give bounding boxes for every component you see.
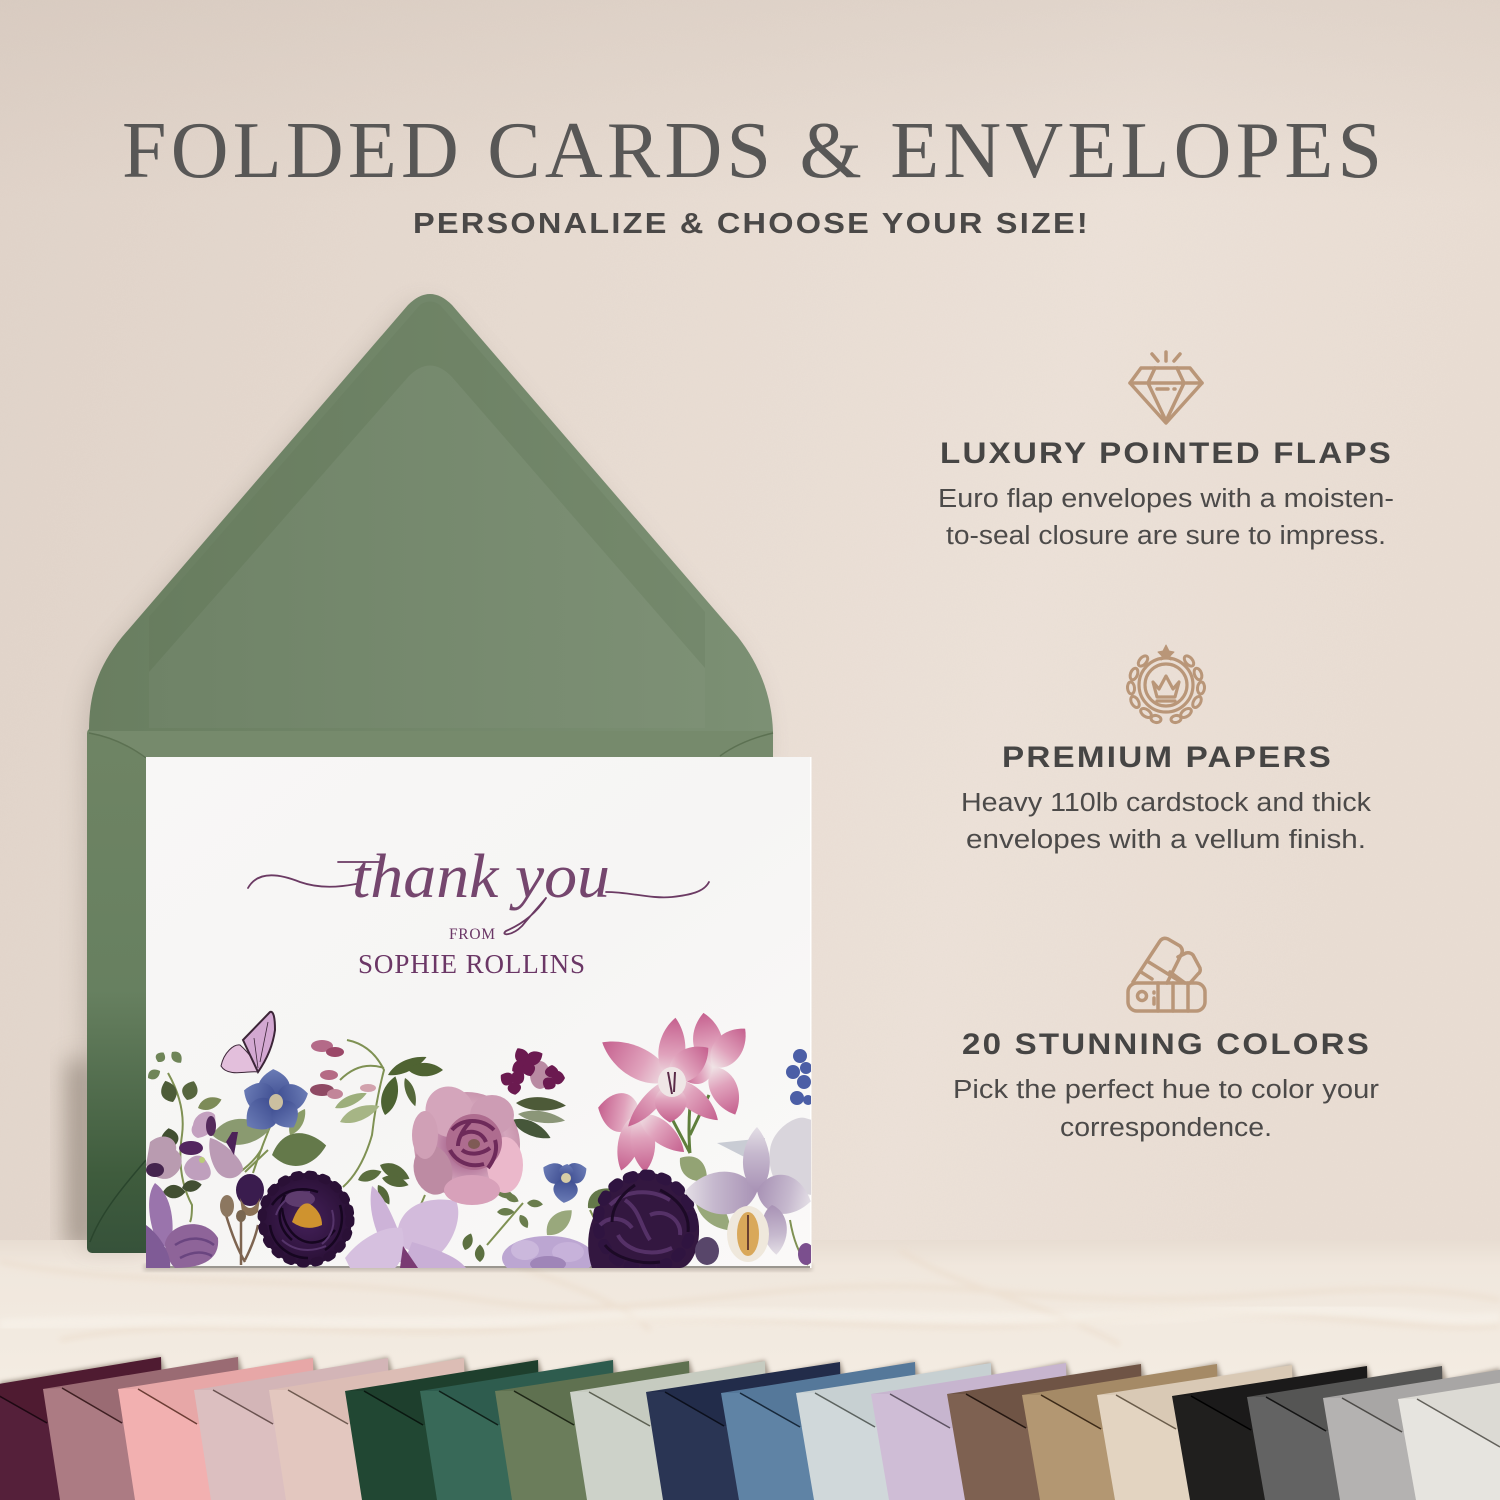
- lilac carnation: [502, 1236, 592, 1268]
- lilac cattleya orchid: [684, 1127, 815, 1262]
- heading: 20 STUNNING COLORS: [962, 1028, 1371, 1061]
- white orchid: [717, 1118, 812, 1195]
- purple flower corner: [798, 1243, 811, 1265]
- card shadow: [144, 1264, 812, 1271]
- icon: crown seal: [1127, 645, 1205, 723]
- white folded card: [145, 757, 815, 1280]
- butterfly: [221, 1012, 275, 1073]
- envelope: mauve: [43, 1357, 240, 1500]
- blue flower cluster: [786, 1049, 813, 1105]
- sender name: SOPHIE ROLLINS: [358, 949, 585, 979]
- envelope: blush: [194, 1358, 390, 1500]
- description: Pick the perfect hue to color your: [953, 1076, 1380, 1104]
- envelope: forest green: [345, 1360, 540, 1500]
- feature: premium papers: [961, 645, 1371, 854]
- heading: PREMIUM PAPERS: [1002, 741, 1333, 774]
- purple orchid left: [146, 1183, 218, 1268]
- sage green envelope: [81, 294, 773, 1253]
- dark plum rose: [260, 1173, 352, 1265]
- description: to-seal closure are sure to impress.: [946, 522, 1386, 550]
- envelope: dusty blue: [721, 1362, 917, 1500]
- blue flower: [244, 1069, 308, 1130]
- envelope: black: [1172, 1366, 1369, 1500]
- subtitle: PERSONALIZE & CHOOSE YOUR SIZE!: [413, 208, 1090, 240]
- description: Heavy 110lb cardstock and thick: [961, 789, 1371, 817]
- pink lily flowers: [598, 1013, 746, 1170]
- sweet pea blossoms: [146, 1112, 243, 1180]
- lilac orchid centre: [345, 1186, 466, 1268]
- feature: twenty stunning colors: [953, 938, 1380, 1142]
- envelope: rose beige: [269, 1358, 466, 1500]
- thank you script: [248, 843, 709, 934]
- pink vine buds: [310, 1040, 376, 1099]
- envelope liner: [149, 366, 705, 728]
- envelope: navy: [646, 1362, 842, 1500]
- dark plum carnation: [588, 1172, 719, 1269]
- liner side folds: [149, 302, 705, 672]
- colour envelope strip: [0, 1357, 1500, 1500]
- envelope band: [89, 731, 773, 760]
- feature: luxury pointed flaps: [938, 352, 1394, 550]
- envelope: lilac: [871, 1363, 1068, 1500]
- envelope flap: [89, 294, 773, 732]
- envelope: tan: [1022, 1364, 1219, 1500]
- envelope: cream: [1097, 1365, 1294, 1500]
- envelope: charcoal: [1247, 1366, 1444, 1500]
- envelope: pale sage: [570, 1361, 767, 1500]
- small blue flower: [543, 1163, 586, 1203]
- botanical floral border: [145, 1010, 815, 1280]
- description: envelopes with a vellum finish.: [966, 826, 1366, 854]
- title: FOLDED CARDS & ENVELOPES: [122, 107, 1382, 195]
- stems: [168, 1040, 808, 1265]
- dark bud: [220, 1174, 264, 1222]
- icon: diamond: [1130, 352, 1202, 423]
- description: Euro flap envelopes with a moisten-: [938, 485, 1394, 513]
- thank you script: thank you: [352, 843, 610, 911]
- from label: FROM: [449, 926, 495, 943]
- envelope: teal green: [420, 1360, 615, 1500]
- heading: LUXURY POINTED FLAPS: [940, 437, 1393, 470]
- envelope: brown: [947, 1364, 1143, 1500]
- magenta flower cluster: [500, 1048, 565, 1095]
- envelope: silver: [1323, 1367, 1500, 1500]
- pink peony rose: [412, 1086, 523, 1205]
- envelope: pale blue: [796, 1363, 993, 1500]
- colour envelope strip shadow: [0, 1356, 1500, 1420]
- description: correspondence.: [1060, 1114, 1272, 1142]
- leaves: [145, 1049, 738, 1262]
- envelope: olive: [495, 1361, 691, 1500]
- envelope: pink: [118, 1358, 315, 1500]
- envelope: off white: [1398, 1378, 1500, 1500]
- icon: colour swatch fan: [1128, 938, 1205, 1011]
- marble table top: [0, 1240, 1500, 1500]
- envelope: burgundy: [0, 1357, 163, 1500]
